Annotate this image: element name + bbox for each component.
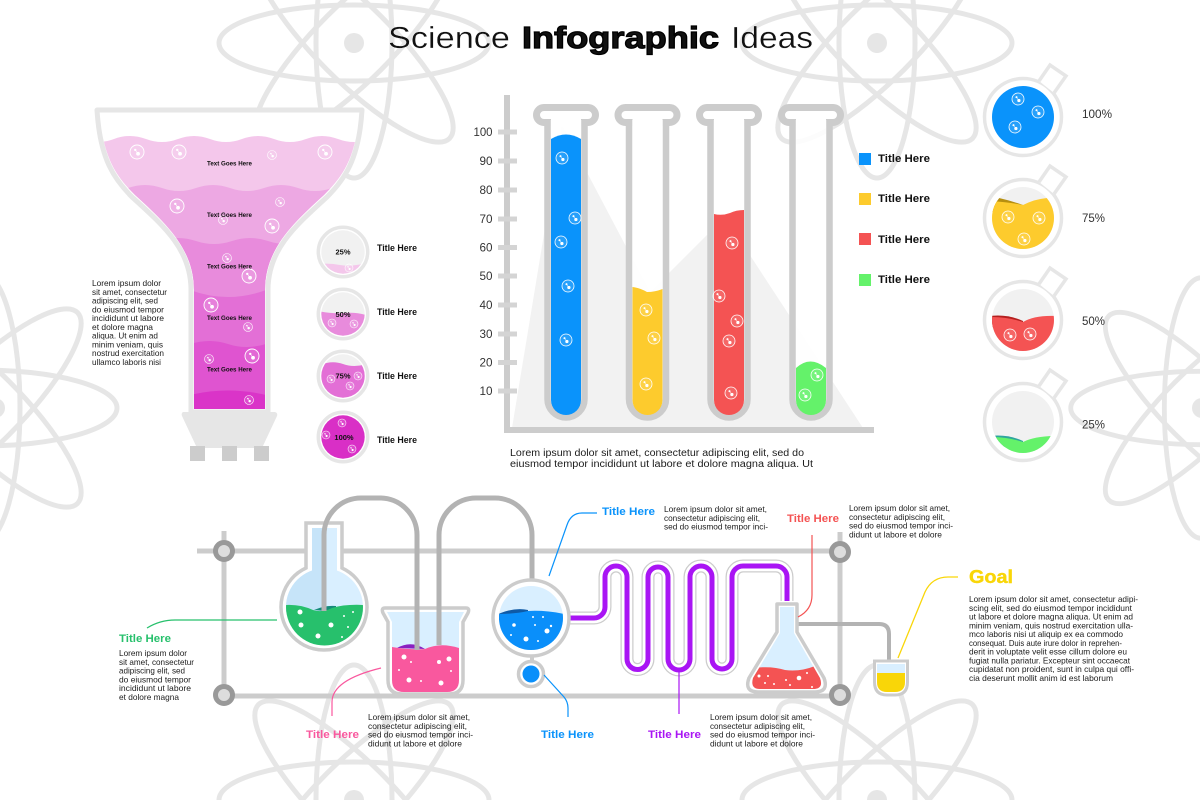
chart legend: Title Here: [878, 274, 930, 286]
callout: goal: mco laboris nisi ut aliquip ex ea commodo: [969, 629, 1123, 639]
axis labels: [474, 127, 492, 398]
funnel labels: Text Goes Here: [207, 160, 252, 168]
beaker pink: [382, 608, 469, 694]
goal beaker: [874, 661, 908, 695]
round flasks column: [984, 65, 1112, 460]
funnel labels: Text Goes Here: [207, 366, 252, 374]
circle 75%: Title Here: [377, 371, 417, 381]
funnel paragraph: ullamco laboris nisi: [92, 357, 161, 367]
chart legend: Title Here: [878, 153, 930, 165]
title: Science: [388, 20, 510, 55]
funnel paragraph: nostrud exercitation: [92, 348, 164, 358]
callout: purple: Title Here: [648, 729, 701, 741]
callout: green: Lorem ipsum dolor: [119, 648, 187, 658]
funnel chart: [82, 110, 370, 461]
circle 50%: Title Here: [377, 307, 417, 317]
flask 50%: [984, 268, 1105, 358]
callout: pink: [306, 668, 473, 748]
callout: green: et dolore magna: [119, 692, 179, 702]
circle 25%: Title Here: [377, 243, 417, 253]
callout: purple: sed do eiusmod tempor inci-: [710, 730, 815, 740]
callout: pink: didunt ut labore et dolore: [368, 738, 462, 748]
axis labels: 70: [480, 214, 492, 226]
round flask green: [281, 523, 367, 650]
callout: goal: ut labore et dolore magna aliqua. Ut enim ad: [969, 612, 1133, 622]
axis labels: 40: [480, 300, 492, 312]
title: Ideas: [731, 20, 813, 55]
circle 100%: 100%: [334, 433, 354, 442]
callout: blue bottom: Title Here: [541, 729, 594, 741]
callout: goal: [898, 567, 1138, 683]
chart legend: Title Here: [878, 193, 930, 205]
funnel paragraph: Lorem ipsum dolor: [92, 278, 161, 288]
callout: goal: fugiat nulla pariatur. Excepteur sint occaecat: [969, 655, 1131, 665]
funnel labels: [207, 160, 252, 374]
title: Infographic: [522, 20, 719, 55]
callout: red: [787, 503, 953, 617]
callout: red: Lorem ipsum dolor sit amet,: [849, 503, 950, 513]
flask 100%: [984, 65, 1112, 156]
callout: purple: didunt ut labore et dolore: [710, 738, 803, 748]
callout: red: didunt ut labore et dolore: [849, 529, 942, 539]
callout: red: consectetur adipiscing elit,: [849, 512, 945, 522]
axis labels: 60: [480, 242, 492, 254]
callout: purple: [648, 670, 815, 748]
funnel liquid layers: [104, 136, 355, 409]
callout: red: Title Here: [787, 513, 839, 525]
funnel paragraph: et dolore magna: [92, 322, 153, 332]
flask 100%: 100%: [1082, 107, 1112, 121]
tube yellow: [618, 108, 677, 418]
axis labels: 80: [480, 185, 492, 197]
chart paragraph: Lorem ipsum dolor sit amet, consectetur adipiscing elit, sed do: [510, 448, 804, 459]
title: [388, 20, 813, 55]
circle 100%: [318, 412, 417, 462]
callout: goal: scing elit, sed do eiusmod tempor incididunt: [969, 603, 1133, 613]
callout: green: [119, 620, 277, 702]
callout: green: do eiusmod tempor: [119, 674, 191, 684]
chart legend: [859, 153, 930, 286]
circle 75%: [318, 351, 417, 401]
funnel paragraph: minim veniam, quis: [92, 339, 163, 349]
funnel paragraph: aliqua. Ut enim ad: [92, 330, 158, 340]
funnel body: [97, 110, 362, 412]
callout: pink: sed do eiusmod tempor inci-: [368, 730, 473, 740]
axis labels: 10: [480, 386, 492, 398]
flask 25%: 25%: [1082, 418, 1105, 432]
chart paragraph: [510, 448, 813, 470]
tube red: [700, 108, 758, 418]
chart legend: Title Here: [878, 234, 930, 246]
flask 50%: 50%: [1082, 314, 1105, 328]
circle 100%: Title Here: [377, 435, 417, 445]
glass tubes: [324, 498, 532, 650]
axis labels: 20: [480, 358, 492, 370]
callout: green: adipiscing elit, sed: [119, 666, 185, 676]
funnel bubbles: [130, 145, 332, 404]
lab apparatus: [197, 498, 908, 704]
callout: goal: derit in voluptate velit esse cillum dolore eu: [969, 646, 1127, 656]
callout: red: sed do eiusmod tempor inci-: [849, 520, 953, 530]
flask 25%: [984, 370, 1105, 460]
funnel paragraph: incididunt ut labore: [92, 313, 164, 323]
circle 25%: [318, 227, 417, 277]
circle 50%: [318, 289, 417, 339]
callout: blue top: [549, 504, 768, 576]
callout: goal: minim veniam, quis nostrud exercitation ulla-: [969, 620, 1133, 630]
axes: [498, 95, 874, 433]
funnel labels: Text Goes Here: [207, 212, 252, 219]
funnel base: [182, 412, 277, 461]
funnel labels: Text Goes Here: [207, 315, 252, 322]
purple coil: [570, 566, 787, 670]
callout: blue top: Title Here: [602, 506, 655, 518]
funnel labels: Text Goes Here: [207, 264, 252, 270]
funnel paragraph: adipiscing elit, sed: [92, 296, 158, 306]
callout: blue top: consectetur adipiscing elit,: [664, 513, 760, 523]
axis labels: 100: [474, 127, 492, 139]
callout: green: sit amet, consectetur: [119, 657, 194, 667]
circle 50%: 50%: [335, 310, 351, 319]
funnel paragraph: [92, 278, 167, 367]
round flask blue: [493, 580, 569, 686]
circle 75%: 75%: [335, 372, 351, 380]
test tube chart: [474, 95, 874, 433]
callout: green: Title Here: [119, 633, 171, 645]
support rods: [197, 531, 842, 698]
axis labels: 50: [480, 271, 492, 283]
callout: purple: consectetur adipiscing elit,: [710, 721, 805, 731]
callout: blue top: sed do eiusmod tempor inci-: [664, 522, 768, 532]
grey connector to goal: [798, 624, 889, 660]
callout: goal: Lorem ipsum dolor sit amet, consectetur adipi-: [969, 594, 1138, 604]
callout: goal: Goal: [969, 567, 1013, 587]
callout: green: incididunt ut labore: [119, 683, 191, 693]
chart paragraph: eiusmod tempor incididunt ut labore et dolore magna aliqua. Ut: [510, 459, 813, 470]
flask 75%: [984, 166, 1105, 256]
callout: pink: Title Here: [306, 729, 359, 741]
axis labels: 30: [480, 329, 492, 341]
callout: pink: consectetur adipiscing elit,: [368, 721, 467, 731]
circle 25%: 25%: [335, 248, 351, 256]
rod joints: [216, 542, 848, 704]
callout: goal: cia deserunt mollit anim id est laborum: [969, 673, 1113, 683]
tube green: [782, 108, 840, 418]
tube blue: [536, 108, 596, 418]
background mountains: [512, 125, 863, 428]
axis labels: 90: [480, 156, 492, 168]
funnel paragraph: do eiusmod tempor: [92, 304, 164, 314]
percent circles column: [318, 227, 417, 462]
flask 75%: 75%: [1082, 211, 1105, 225]
erlenmeyer flask red: [745, 604, 830, 695]
callout: blue top: Lorem ipsum dolor sit amet,: [664, 504, 767, 514]
callout: blue bottom: [541, 675, 594, 741]
callout: goal: consequat. Duis aute irure dolor in reprehen-: [969, 638, 1122, 648]
callout: purple: Lorem ipsum dolor sit amet,: [710, 712, 812, 722]
callout: goal: cupidatat non proident, sunt in culpa qui offi-: [969, 664, 1134, 674]
callout: pink: Lorem ipsum dolor sit amet,: [368, 712, 470, 722]
funnel paragraph: sit amet, consectetur: [92, 287, 167, 297]
